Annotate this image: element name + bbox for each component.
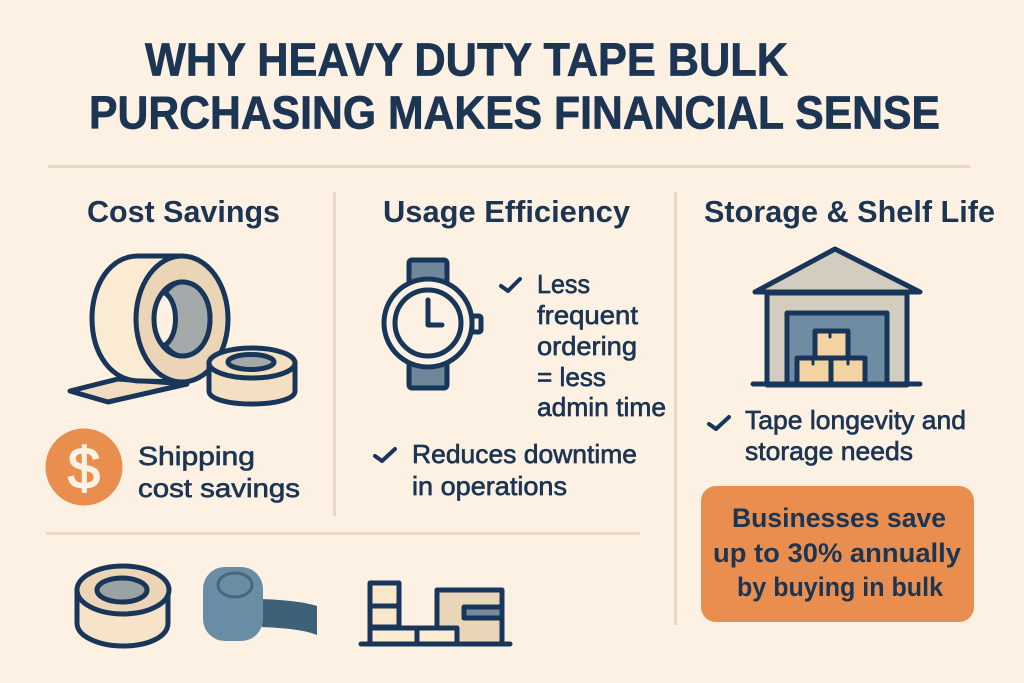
icon: blue tape roll xyxy=(203,567,317,641)
title: WHY HEAVY DUTY TAPE BULK xyxy=(145,34,788,86)
title: PURCHASING MAKES FINANCIAL SENSE xyxy=(89,86,940,138)
text: less frequent ordering xyxy=(537,269,666,422)
text: tape longevity: storage needs xyxy=(745,436,913,466)
text: tape longevity xyxy=(745,405,966,466)
icon: warehouse xyxy=(753,249,920,385)
heading: storage: Storage & Shelf Life xyxy=(704,194,995,229)
icon: tape roll xyxy=(77,566,169,646)
icon: check xyxy=(709,417,729,429)
text: shipping cost savings: Shipping xyxy=(138,441,255,471)
title xyxy=(89,34,940,138)
text: reduces downtime xyxy=(412,439,637,501)
text: less frequent ordering: Less xyxy=(537,269,590,299)
text: reduces downtime: in operations xyxy=(412,471,567,501)
callout: savings: by buying in bulk xyxy=(737,572,944,602)
panel: storage and shelf life xyxy=(701,194,995,622)
icon: large tape roll and small roll xyxy=(70,256,295,404)
callout: savings xyxy=(701,486,974,622)
heading: cost savings: Cost Savings xyxy=(87,194,280,229)
heading: usage efficiency: Usage Efficiency xyxy=(383,194,631,229)
text: tape longevity: Tape longevity and xyxy=(745,405,966,435)
icon: dollar coin xyxy=(46,428,122,506)
callout: savings: up to 30% annually xyxy=(713,538,961,568)
icon: dollar coin: $ xyxy=(68,436,100,501)
icon: boxes xyxy=(361,583,510,644)
text: less frequent ordering: = less xyxy=(537,362,606,392)
text: shipping cost savings: cost savings xyxy=(138,473,300,503)
text: reduces downtime: Reduces downtime xyxy=(412,439,637,469)
icon: wristwatch xyxy=(384,260,481,388)
text: less frequent ordering: frequent xyxy=(537,300,639,330)
icon row: bottom xyxy=(77,566,510,646)
panel: cost savings xyxy=(46,194,300,506)
icon: check xyxy=(501,279,520,291)
text: less frequent ordering: admin time xyxy=(537,392,666,422)
text: less frequent ordering: ordering xyxy=(537,331,637,361)
icon: check xyxy=(375,449,395,461)
callout: savings: Businesses save xyxy=(732,503,946,533)
panel: usage efficiency xyxy=(375,194,666,501)
text: shipping cost savings xyxy=(138,441,300,503)
